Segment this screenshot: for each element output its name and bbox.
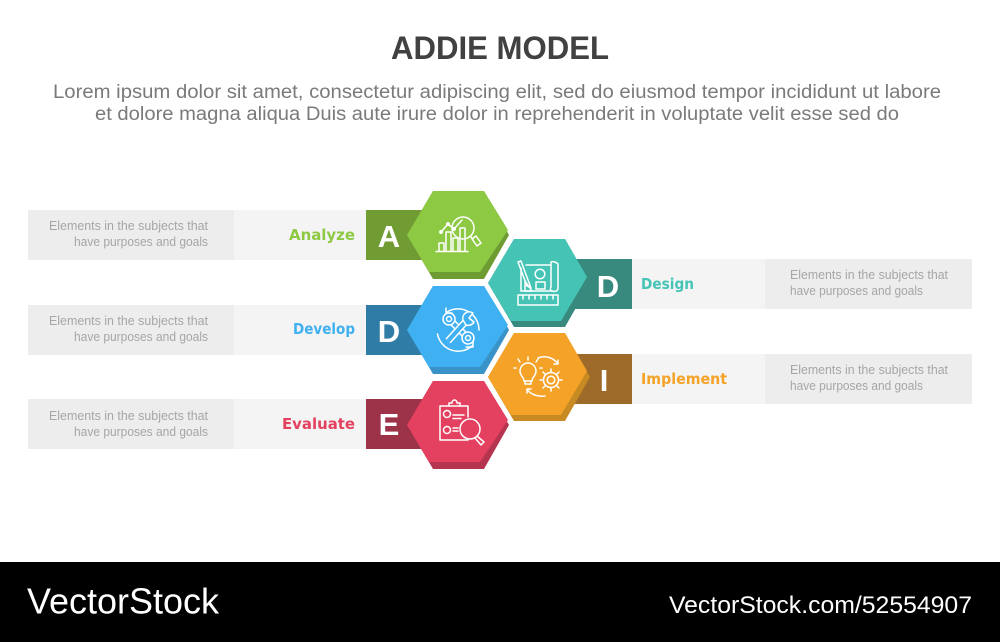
icon: blueprint and ruler <box>518 261 558 305</box>
icon: tools in circular arrows <box>438 308 479 351</box>
panel: evaluate row: Elements in the subjects that <box>49 409 209 423</box>
panel: implement row <box>570 354 972 404</box>
subtitle text: et dolore magna aliqua Duis aute irure dolor in reprehenderit in voluptate velit esse sed do <box>95 104 899 125</box>
footer url text: VectorStock.com/52554907 <box>669 592 972 619</box>
panel: evaluate row <box>28 399 426 449</box>
panel: evaluate row: Evaluate <box>282 415 355 433</box>
panel: design row: Elements in the subjects that <box>790 268 949 282</box>
panel: develop row <box>28 305 426 355</box>
panel: analyze row: Elements in the subjects that <box>49 219 209 233</box>
title: ADDIE MODEL <box>391 30 609 66</box>
panel: implement row: Elements in the subjects that <box>790 363 949 377</box>
hexagon: evaluate <box>407 381 509 469</box>
subtitle text <box>53 82 941 125</box>
subtitle text: Lorem ipsum dolor sit amet, consectetur adipiscing elit, sed do eiusmod tempor incididunt ut labore <box>53 82 941 103</box>
panel: analyze row <box>28 210 426 260</box>
panel: evaluate row: have purposes and goals <box>74 425 208 439</box>
panel: analyze row: Analyze <box>289 226 355 244</box>
hexagon: design <box>488 239 590 327</box>
hexagon: develop <box>407 286 509 374</box>
panel: analyze row: have purposes and goals <box>74 235 208 249</box>
panel: develop row: Develop <box>293 320 355 338</box>
icon: clipboard and magnifier <box>440 400 484 445</box>
panel: implement row: Implement <box>641 370 727 388</box>
icon: light bulb and gear cycle <box>514 357 562 396</box>
hexagon: analyze <box>407 191 509 279</box>
hexagon: implement <box>488 333 590 421</box>
panel: evaluate row: E <box>379 407 399 442</box>
footer bar <box>0 562 1000 642</box>
panel: develop row: have purposes and goals <box>74 330 208 344</box>
footer logo text: VectorStock <box>27 580 220 622</box>
panel: design row: D <box>597 269 619 304</box>
panel: design row <box>570 259 972 309</box>
icon: chart and magnifier <box>436 217 481 252</box>
panel: design row: have purposes and goals <box>790 284 923 298</box>
panel: design row: Design <box>641 275 694 293</box>
panel: develop row: D <box>378 314 400 349</box>
panel: implement row: I <box>600 363 608 398</box>
panel: develop row: Elements in the subjects that <box>49 314 209 328</box>
panel: implement row: have purposes and goals <box>790 379 923 393</box>
panel: analyze row: A <box>378 219 400 254</box>
